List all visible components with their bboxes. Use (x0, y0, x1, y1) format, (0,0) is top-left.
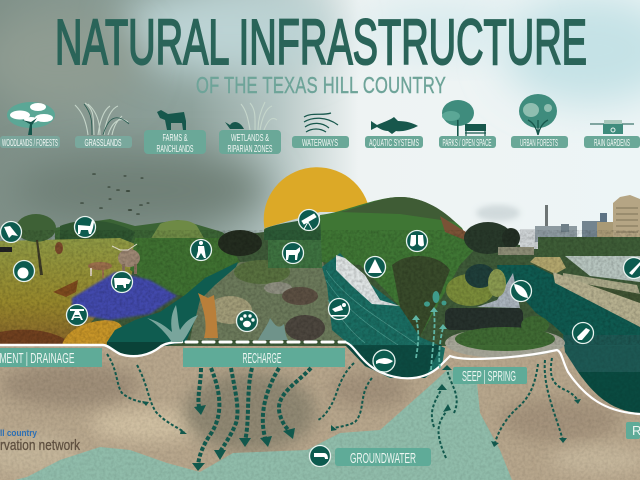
label: reuse, cropped (626, 422, 640, 439)
subtitle: OF THE TEXAS HILL COUNTRY (196, 73, 446, 99)
soil cross-section (0, 345, 640, 480)
basin lower shade (107, 342, 183, 356)
right city scene and river (497, 237, 640, 413)
category: wetlands and riparian zones: WETLANDS & (231, 132, 269, 144)
recharge and river bed outline (0, 342, 640, 414)
city skyline (476, 195, 640, 250)
seep flow arrows (318, 358, 581, 458)
plants: agave and fox (147, 293, 288, 342)
meadow tree (16, 214, 56, 275)
text: PARKS / OPEN SPACE (442, 137, 492, 149)
icon: drinking fountain (572, 322, 594, 344)
icon: binoculars (406, 230, 428, 252)
icon: swimmer (328, 298, 350, 320)
category: urban forests (511, 94, 568, 149)
icon: telescope (298, 210, 320, 230)
category: aquatic systems: AQUATIC SYSTEMS (369, 137, 419, 149)
icon: deer (74, 216, 96, 238)
text: WOODLANDS / FORESTS (2, 137, 58, 149)
category: farms and ranchlands (144, 110, 206, 155)
icon: fish (373, 350, 395, 372)
spring fountain (412, 291, 447, 370)
icon: paw (236, 310, 258, 332)
scene base (0, 225, 640, 346)
monarch butterfly (53, 280, 78, 297)
category: wetlands and riparian zones (219, 102, 281, 155)
category: wetlands and riparian zones: RIPARIAN ZONES (228, 143, 272, 155)
groundwater body (15, 370, 512, 480)
label: catchment drainage: MENT | DRAINAGE (0, 350, 74, 367)
background hills and left meadow (0, 219, 240, 345)
label: seep and spring (453, 367, 527, 385)
longhorn cattle (0, 242, 140, 278)
category: woodlands / forests (0, 102, 60, 149)
mountain (320, 197, 520, 337)
center rocks and scrub (190, 216, 345, 341)
icon: hiker (190, 240, 212, 260)
icon: cow (112, 272, 132, 292)
foliage texture (0, 230, 640, 345)
logo text: ll country (0, 428, 37, 438)
label: recharge (183, 348, 345, 367)
category: aquatic systems (365, 117, 423, 149)
recharge basin fill (107, 262, 238, 356)
drainage flow arrows (107, 354, 187, 434)
left river (322, 253, 445, 378)
icon: camping tent (364, 256, 386, 278)
icon: kayak (510, 280, 532, 302)
logo text (0, 428, 80, 454)
icon: goat (282, 242, 304, 264)
icon: paintbrush (624, 258, 640, 278)
category: parks / open space (439, 100, 496, 149)
category: farms and ranchlands: RANCHLANDS (156, 143, 194, 155)
grotto and spring pool (445, 264, 565, 358)
logo text: rvation network (0, 437, 80, 454)
category: grasslands: GRASSLANDS (84, 137, 122, 149)
label: groundwater (335, 448, 431, 467)
icon: apple (14, 260, 34, 282)
label: recharge: RECHARGE (242, 350, 282, 367)
sky background (0, 0, 640, 360)
category: farms and ranchlands: FARMS & (162, 132, 188, 144)
label: seep and spring: SEEP | SPRING (462, 368, 516, 385)
label: groundwater: GROUNDWATER (350, 450, 416, 467)
icon: bird (0, 222, 22, 242)
category: waterways (292, 113, 349, 149)
icon: groundwater faucet (310, 446, 330, 466)
recharge flow arrows (192, 368, 311, 471)
bluebonnet flowers (72, 272, 177, 320)
category: waterways: WATERWAYS (302, 137, 338, 149)
sun (264, 167, 369, 231)
category: rain gardens (584, 120, 640, 149)
category: urban forests: URBAN FORESTS (520, 137, 558, 149)
icon: picnic table (66, 304, 88, 326)
category: grasslands (75, 103, 132, 149)
soil texture (0, 346, 640, 480)
bird flock (80, 173, 150, 215)
